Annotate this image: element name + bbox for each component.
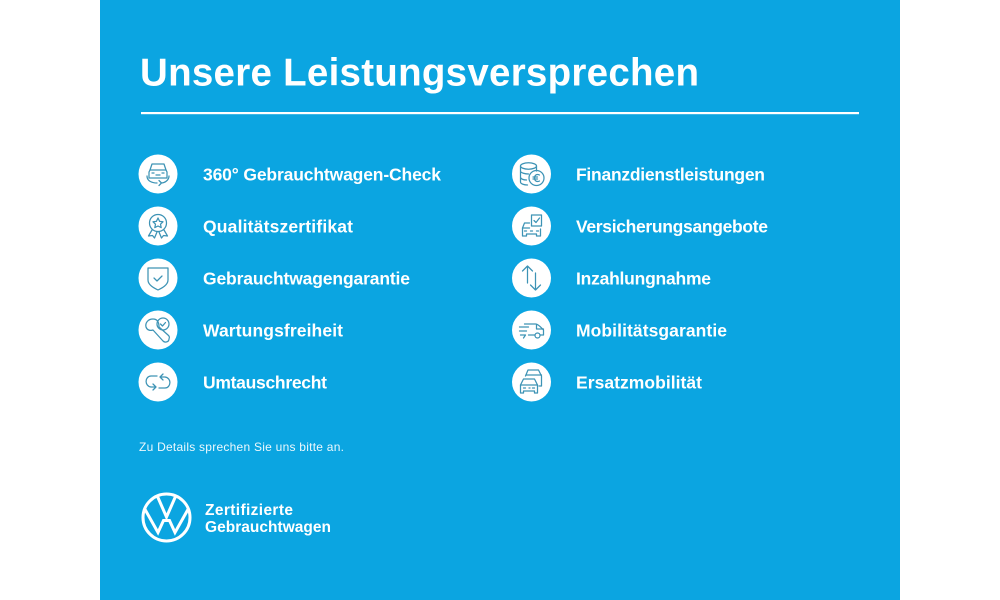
icon: car with rotation arrow — [147, 164, 169, 186]
brand label: Gebrauchtwagen — [205, 519, 331, 536]
list item: Umtauschrecht — [138, 362, 327, 402]
list item: Ersatzmobilität — [512, 362, 702, 402]
list item: Versicherungsangebote: Versicherungsangebote — [576, 216, 768, 236]
list item: Mobilitätsgarantie: Mobilitätsgarantie — [576, 320, 727, 340]
icon: shield with check — [148, 268, 168, 290]
list item: Qualitätszertifikat: Qualitätszertifikat — [203, 216, 353, 236]
brand label: Zertifizierte — [205, 502, 293, 519]
list item: Inzahlungnahme: Inzahlungnahme — [576, 268, 711, 288]
logo: VW emblem — [143, 494, 190, 541]
list item: Gebrauchtwagengarantie: Gebrauchtwagengarantie — [203, 268, 410, 288]
list item: Gebrauchtwagengarantie — [138, 258, 410, 298]
footnote: Zu Details sprechen Sie uns bitte an. — [139, 440, 344, 454]
icon: exchange arrows — [146, 374, 170, 390]
list item: Finanzdienstleistungen: Finanzdienstleistungen — [576, 164, 765, 184]
list item: Wartungsfreiheit: Wartungsfreiheit — [203, 320, 343, 340]
list item: 360° Gebrauchtwagen-Check: 360° Gebrauchtwagen-Check — [203, 164, 441, 184]
icon: coins with euro — [520, 163, 544, 186]
icon: wrench with check — [146, 318, 169, 342]
title: Unsere Leistungsversprechen — [140, 52, 699, 94]
list item: Umtauschrecht: Umtauschrecht — [203, 372, 327, 392]
list item: Finanzdienstleistungen — [512, 154, 765, 194]
list item: Inzahlungnahme — [512, 258, 711, 298]
list item: 360° Gebrauchtwagen-Check — [138, 154, 441, 194]
list item: Mobilitätsgarantie — [512, 310, 727, 350]
list item: Qualitätszertifikat — [138, 206, 353, 246]
brand label — [205, 502, 331, 536]
list item: Wartungsfreiheit — [138, 310, 343, 350]
icon: two cars — [520, 370, 542, 393]
icon: moving van — [520, 324, 544, 338]
panel: blue background — [100, 0, 900, 600]
icon: up and down arrows — [522, 266, 540, 290]
list item: Ersatzmobilität: Ersatzmobilität — [576, 372, 702, 392]
icon: award rosette — [148, 214, 168, 238]
list item: Versicherungsangebote — [512, 206, 768, 246]
icon: car with checked document — [522, 215, 542, 236]
